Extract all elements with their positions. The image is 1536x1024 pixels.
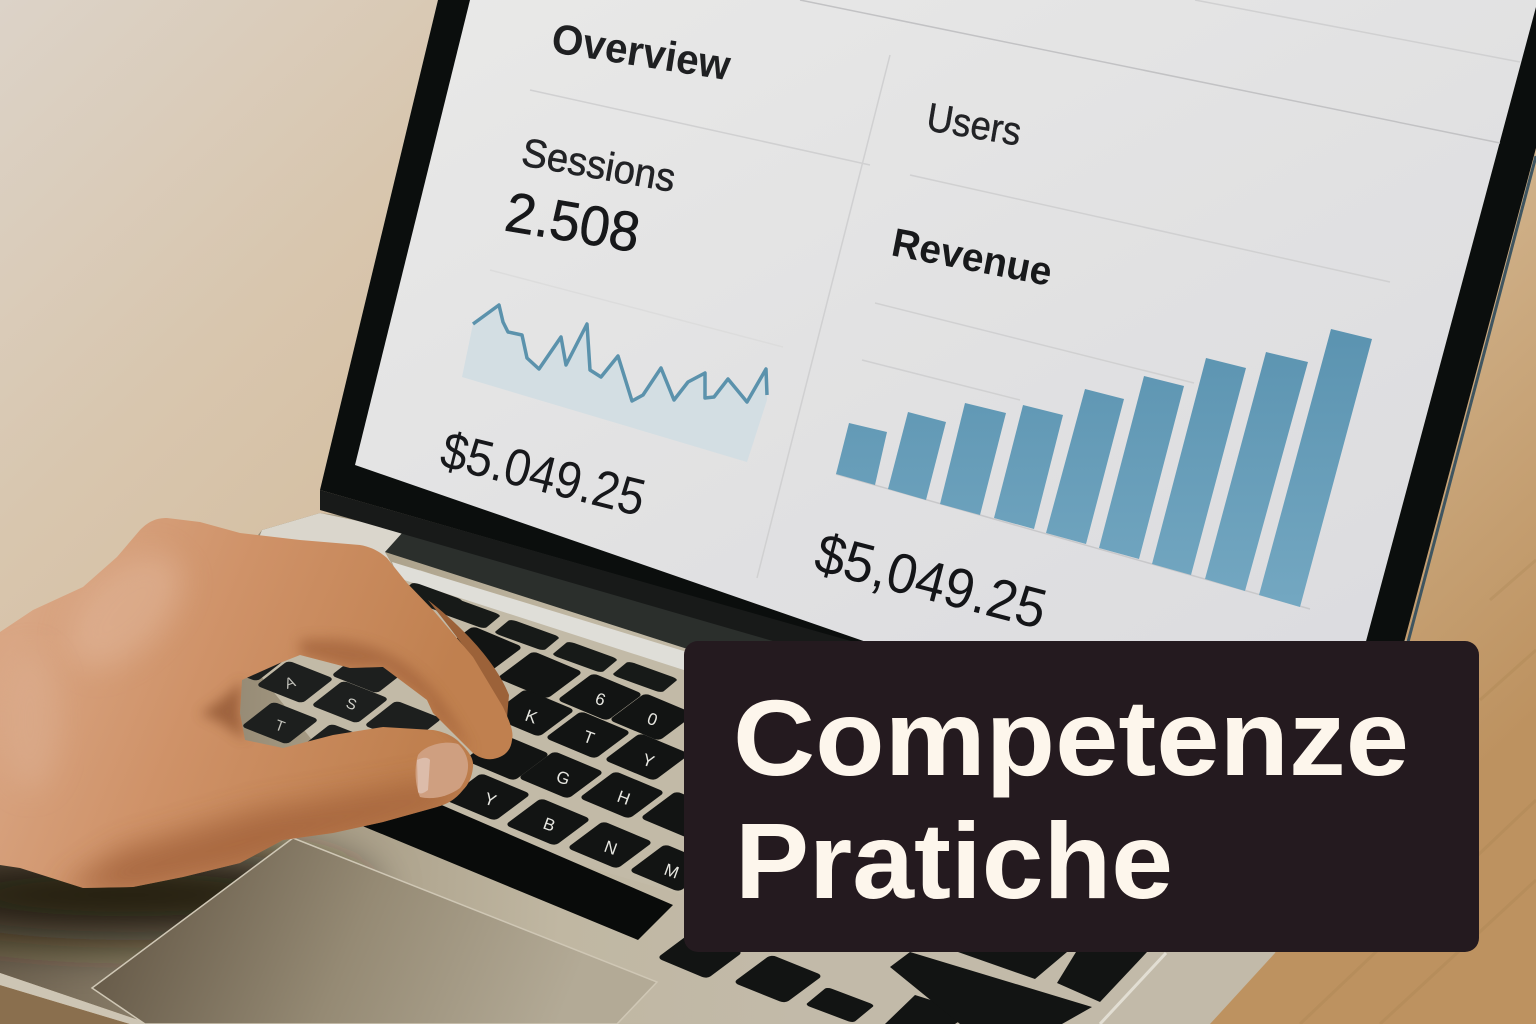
hand shading, clipped to the silhouette	[15, 554, 466, 888]
web crease	[200, 680, 245, 740]
key letters: N	[602, 837, 620, 859]
key letters: G	[554, 767, 573, 789]
laptop lid with bezel	[320, 0, 1536, 672]
key letters: B	[541, 814, 558, 836]
light strip above keyboard	[392, 562, 700, 672]
value: 2.508: 2.508	[501, 180, 645, 264]
key letters: 0	[645, 709, 660, 730]
key letters	[273, 673, 681, 883]
title line 1: Competenze	[733, 677, 1409, 798]
left keys	[256, 660, 334, 704]
key letters: Y	[640, 750, 657, 772]
front lip	[0, 973, 150, 1024]
hinge	[385, 532, 900, 700]
knuckle highlight	[72, 554, 184, 666]
letter keys	[489, 689, 575, 737]
key letters: T	[581, 727, 597, 748]
laptop base	[0, 513, 1410, 1024]
laptop screen dashboard	[355, 0, 1536, 645]
heading: Overview: Overview	[549, 14, 734, 89]
nail highlight	[417, 758, 430, 793]
value: $5.049.25 left: $5.049.25	[435, 421, 651, 528]
key letters: A	[283, 673, 298, 693]
key letters: M	[662, 860, 681, 883]
shadow under hand	[0, 850, 370, 940]
hand typing on keyboard	[0, 518, 513, 895]
key letters: Y	[482, 789, 499, 811]
bottom row keys	[657, 931, 743, 979]
bar chart: revenue	[836, 329, 1372, 607]
function keys	[396, 582, 678, 693]
key letters: 6	[593, 689, 608, 710]
key letters: H	[615, 787, 633, 809]
wrist highlight	[15, 682, 52, 775]
value: $5,049.25 right: $5,049.25	[809, 521, 1053, 641]
title panel	[684, 641, 1479, 952]
heading: Revenue: Revenue	[888, 221, 1056, 295]
thumb nail	[416, 743, 468, 798]
line chart: sessions	[462, 305, 767, 462]
upper deck highlight	[260, 513, 402, 564]
keyboard	[211, 582, 1166, 1024]
key letters: S	[344, 695, 359, 714]
number keys	[437, 626, 523, 674]
thumb underside shadow	[63, 778, 457, 888]
key letters: T	[273, 717, 287, 736]
trackpad	[92, 838, 657, 1024]
back of hand and index finger	[0, 518, 513, 888]
index finger shading	[297, 635, 463, 739]
space bar	[360, 800, 673, 940]
label: Sessions: Sessions	[518, 131, 679, 201]
title line 2: Pratiche	[735, 800, 1173, 921]
middle finger behind index	[428, 600, 509, 718]
label: Users: Users	[924, 95, 1024, 155]
key letters: K	[523, 706, 540, 728]
keyboard well tone	[262, 570, 552, 846]
